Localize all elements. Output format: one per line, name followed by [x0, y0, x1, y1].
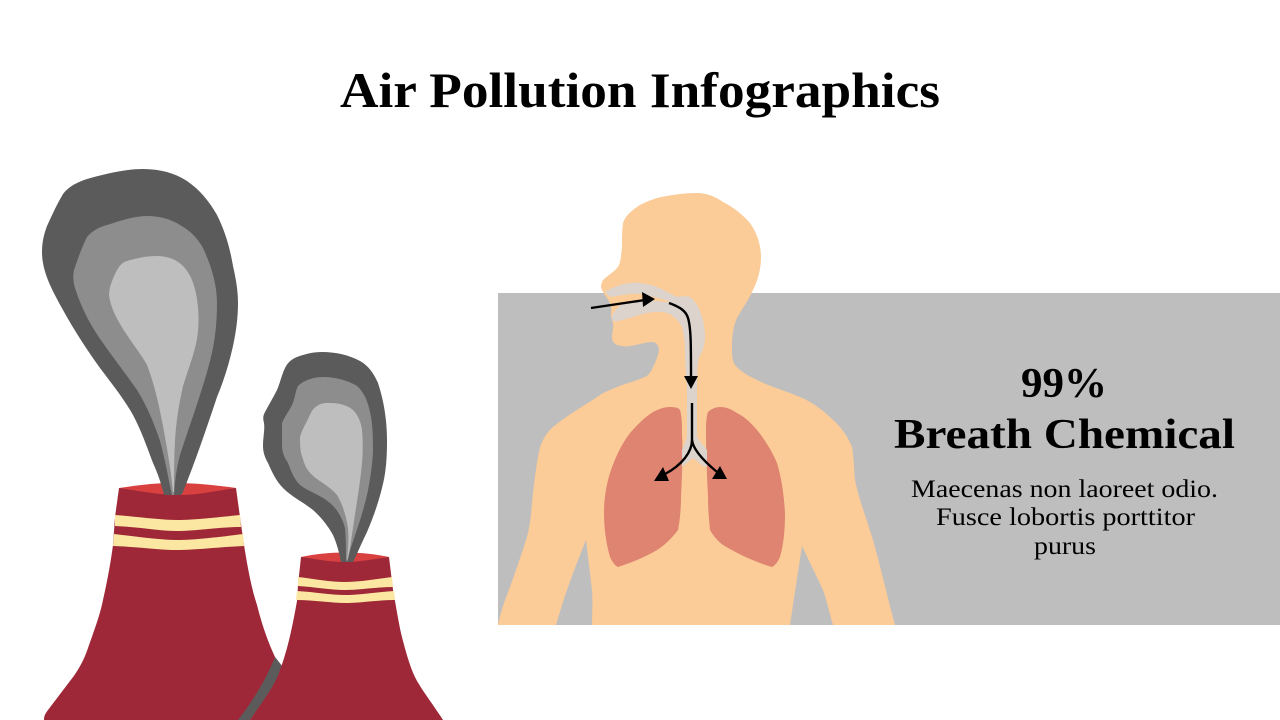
panel: grey breath chemical background	[498, 293, 1280, 625]
stat heading: 99% Breath Chemical: Breath Chemical	[894, 412, 1235, 458]
large smoke inner	[109, 256, 198, 492]
icon: small chimney with smoke	[238, 352, 443, 720]
small chimney stripes	[296, 577, 395, 603]
small smoke outer	[263, 352, 387, 562]
arrow: into left lung	[654, 403, 692, 481]
grey edge between chimneys	[238, 657, 282, 720]
left lung	[604, 407, 682, 567]
body text: purus	[1034, 533, 1096, 560]
large smoke outer	[42, 169, 238, 495]
icon: human body with respiratory system	[498, 193, 895, 625]
arrow: into the mouth	[591, 292, 655, 308]
small chimney opening	[301, 552, 389, 562]
icon: large chimney with smoke	[42, 169, 282, 720]
arrow: down the throat	[669, 303, 698, 389]
large smoke middle	[73, 216, 217, 495]
stat heading: 99% Breath Chemical: 99%	[1021, 361, 1107, 407]
airway	[605, 283, 707, 467]
body text: Maecenas non laoreet odio.	[911, 476, 1218, 503]
body text: Fusce lobortis porttitor	[936, 504, 1196, 531]
large chimney opening	[119, 483, 236, 495]
title: Air Pollution Infographics	[340, 62, 940, 118]
stat heading: 99% Breath Chemical	[894, 361, 1235, 458]
right lung	[706, 407, 785, 567]
body text	[911, 476, 1218, 560]
small smoke inner	[300, 403, 363, 562]
small chimney body	[250, 557, 443, 720]
large chimney stripes	[113, 515, 244, 550]
large chimney body	[44, 488, 282, 720]
arrow: into right lung	[692, 440, 727, 479]
body silhouette	[498, 193, 895, 625]
small smoke middle	[282, 377, 373, 562]
